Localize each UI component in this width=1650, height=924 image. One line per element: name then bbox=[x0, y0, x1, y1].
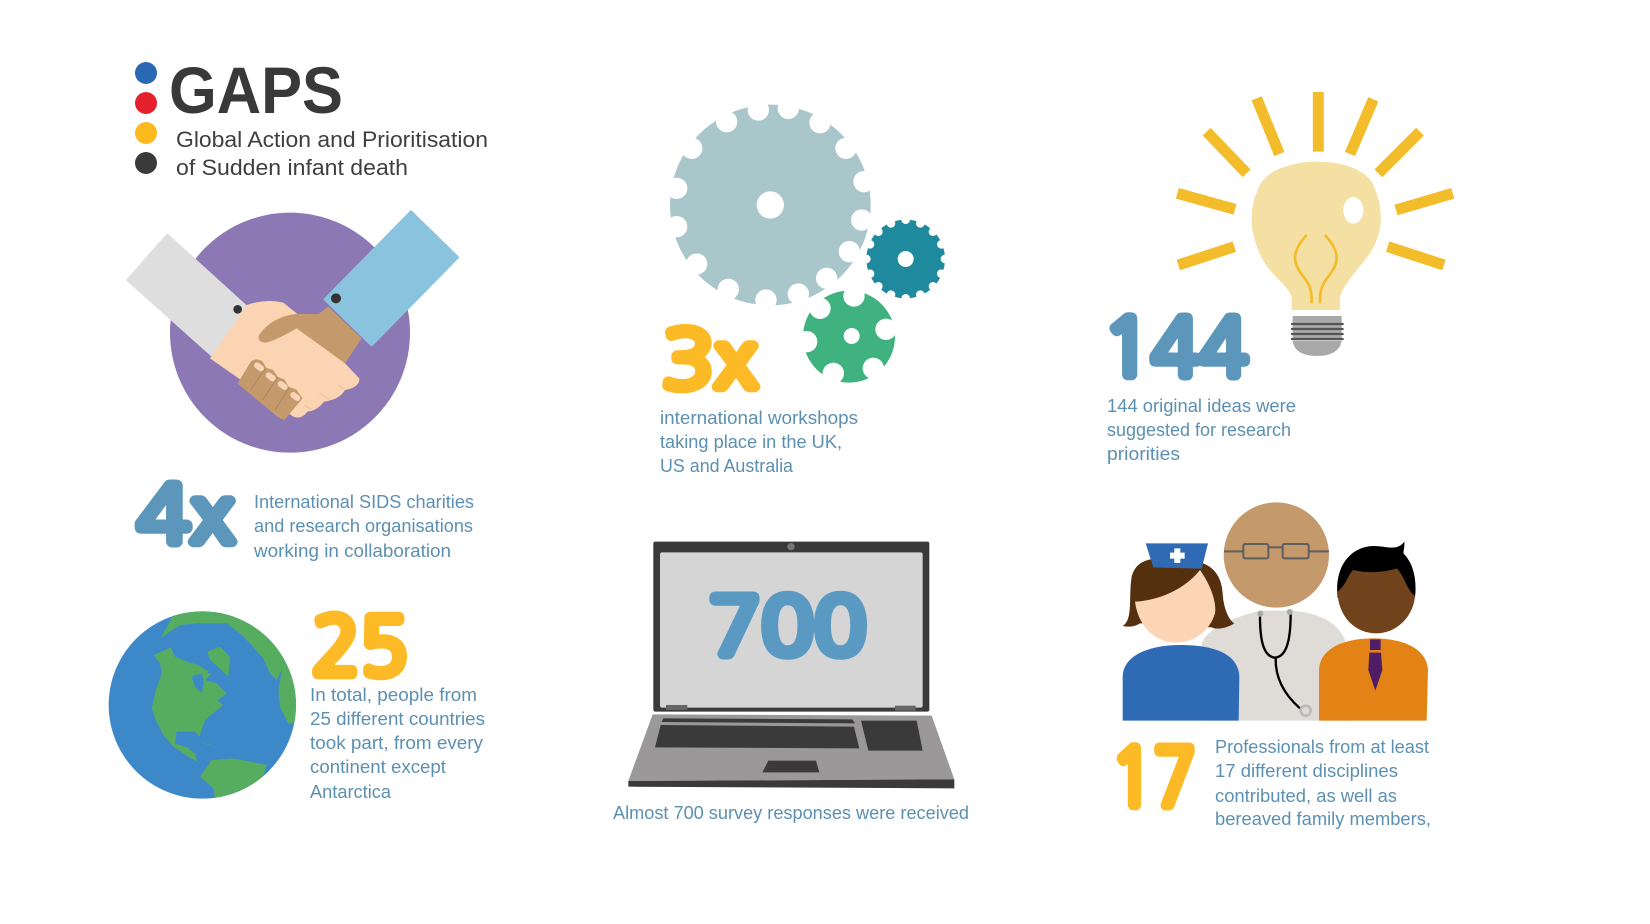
text: workshops description: taking place in the UK, bbox=[660, 431, 842, 452]
stat: 144: 144 bbox=[1103, 310, 1248, 388]
panel: original ideas bbox=[1103, 92, 1453, 464]
panel: professionals bbox=[1111, 502, 1431, 829]
text: professionals description bbox=[1215, 736, 1431, 829]
subtitle: full name bbox=[176, 127, 488, 180]
stat: 700: 700 bbox=[708, 588, 866, 666]
text: professionals description: 17 different disciplines bbox=[1215, 760, 1398, 781]
text: professionals description: contributed, as well as bbox=[1215, 785, 1397, 806]
text: countries description: took part, from every bbox=[310, 732, 484, 753]
stat: 3x: 3x bbox=[662, 322, 758, 400]
panel: 25 countries bbox=[109, 607, 485, 807]
icon: three gears bbox=[666, 98, 950, 387]
text: charities description: and research organisations bbox=[254, 515, 473, 536]
icon: three professionals bbox=[1123, 502, 1428, 721]
text: ideas description: 144 original ideas were bbox=[1107, 395, 1296, 416]
text: professionals description: bereaved family members, bbox=[1215, 808, 1431, 829]
stat: 17: 17 bbox=[1111, 740, 1196, 818]
icon: globe bbox=[109, 607, 300, 807]
stat: 4x: 4x bbox=[137, 476, 235, 554]
text: charities description: International SIDS charities bbox=[254, 491, 474, 512]
text: ideas description: suggested for research bbox=[1107, 419, 1291, 440]
text: charities description: working in collaboration bbox=[253, 540, 451, 561]
text: countries description bbox=[310, 684, 485, 802]
stat: 25: 25 bbox=[312, 608, 408, 686]
icon: four coloured dots bbox=[135, 62, 157, 174]
text: countries description: Antarctica bbox=[310, 781, 392, 802]
text: workshops description: international workshops bbox=[660, 407, 858, 428]
text: charities description bbox=[253, 491, 474, 561]
icon: handshake on purple circle bbox=[128, 212, 458, 453]
panel: GAPS logo bbox=[135, 53, 488, 180]
panel: survey responses bbox=[613, 542, 969, 823]
icon: laptop bbox=[628, 542, 954, 788]
text: workshops description bbox=[660, 407, 858, 476]
text: ideas description: priorities bbox=[1107, 443, 1180, 464]
text: survey caption: Almost 700 survey responses were received bbox=[613, 802, 969, 823]
title: GAPS: GAPS bbox=[169, 53, 343, 127]
text: professionals description: Professionals from at least bbox=[1215, 736, 1429, 757]
text: workshops description: US and Australia bbox=[660, 455, 794, 476]
panel: handshake collaboration bbox=[128, 212, 474, 561]
panel: workshops bbox=[660, 98, 950, 476]
subtitle: full name: Global Action and Prioritisation bbox=[176, 127, 488, 152]
text: countries description: 25 different countries bbox=[310, 708, 485, 729]
text: countries description: In total, people from bbox=[310, 684, 477, 705]
icon: light bulb with rays bbox=[1177, 92, 1453, 356]
subtitle: full name: of Sudden infant death bbox=[176, 155, 408, 180]
text: countries description: continent except bbox=[310, 756, 446, 777]
text: ideas description bbox=[1107, 395, 1296, 464]
